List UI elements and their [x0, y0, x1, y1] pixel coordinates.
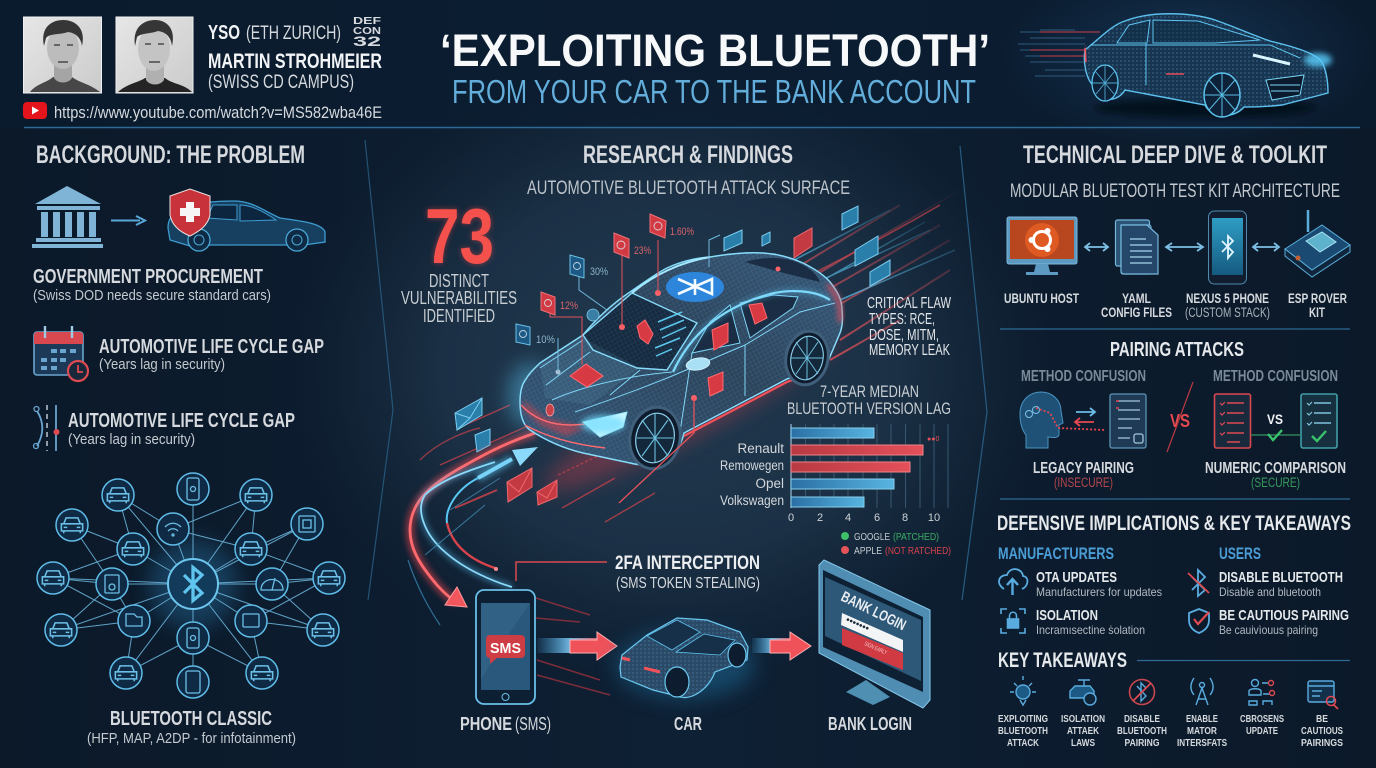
text: isolation: [1036, 607, 1145, 637]
stat: 73 vulnerabilities: IDENTIFIED: [423, 306, 495, 326]
windows: [583, 293, 697, 370]
stat: 73 vulnerabilities: DISTINCT: [429, 271, 489, 291]
axis labels: 4: [845, 512, 851, 524]
speaker names: (ETH ZURICH): [246, 23, 341, 44]
header wireframe car: [1018, 14, 1332, 118]
stat: 73 vulnerabilities: VULNERABILITIES: [401, 288, 517, 308]
window data panel: [655, 312, 686, 356]
icon: numeric comparison: VS: [1267, 412, 1283, 427]
takeaway labels: DISABLE: [1124, 713, 1160, 725]
panel: research and findings: [401, 141, 960, 734]
panel: technical deep dive: [997, 141, 1351, 749]
headlight: [583, 412, 627, 437]
legend: APPLE: [854, 545, 882, 557]
wheels: [624, 327, 833, 474]
pairing labels: (SECURE): [1251, 475, 1300, 490]
hood highlight: [540, 338, 640, 405]
panel dividers: [365, 140, 987, 600]
text: critical flaw types: TYPES: RCE,: [869, 311, 935, 328]
icon: car with swiss shield: [168, 189, 325, 251]
icon: road timeline: [34, 405, 60, 451]
takeaway labels: PAIRINGS: [1301, 737, 1343, 749]
phone streaks: [536, 598, 610, 695]
pairing labels: LEGACY PAIRING: [1033, 460, 1134, 477]
arrow: car to bank: [752, 632, 811, 660]
kit labels: KIT: [1309, 305, 1326, 320]
icon: government building: [32, 186, 103, 248]
kit labels: ESP ROVER: [1288, 291, 1347, 306]
text: disable bluetooth: Disable and bluetooth: [1219, 585, 1321, 599]
icon: browser search: [1308, 681, 1338, 709]
percentage callouts: 10%: [536, 334, 555, 346]
icon: config files: [1116, 220, 1158, 274]
method labels: METHOD CONFUSION: [1021, 368, 1146, 385]
takeaway labels: CBROSENS: [1240, 713, 1284, 725]
panel: background, the problem: [32, 141, 345, 747]
2FA interception callout: 2FA INTERCEPTION: [615, 553, 760, 574]
chain labels: (SMS): [515, 714, 551, 734]
text: critical flaw types: [867, 295, 951, 359]
video link: https://www.youtube.com/watch?v=MS582wba46E: [54, 103, 382, 122]
icon: bluetooth disabled: [1188, 570, 1209, 596]
icon: lock: [1001, 609, 1025, 633]
takeaway labels: UPDATE: [1246, 725, 1278, 737]
icon: shield check: [1189, 609, 1209, 633]
pairing labels: [1033, 460, 1346, 490]
takeaway labels: PAIRING: [1124, 737, 1160, 749]
chart title: 7-YEAR MEDIAN: [820, 382, 919, 401]
text: government procurement: [33, 266, 271, 304]
header divider: [24, 126, 1360, 128]
icon: paired document: [1110, 394, 1146, 448]
speaker names: MARTIN STROHMEIER: [208, 50, 382, 73]
text: government procurement: GOVERNMENT PROCUREMENT: [33, 266, 263, 288]
icon: nexus phone: [1208, 211, 1246, 284]
data streaks: [440, 190, 960, 522]
icon: ubuntu monitor: [1007, 217, 1077, 275]
text: be cautious: [1219, 607, 1349, 637]
icon: car and gear: [1070, 680, 1096, 705]
kit labels: NEXUS 5 PHONE: [1186, 291, 1269, 306]
car body: [520, 253, 842, 465]
legend: (PATCHED): [893, 531, 939, 543]
text: critical flaw types: CRITICAL FLAW: [867, 295, 951, 312]
percentage callouts: 23%: [634, 245, 651, 257]
legend: (NOT RATCHED): [885, 545, 951, 557]
attack chain: [460, 560, 930, 734]
chart: bluetooth version lag: ●●0: [927, 436, 939, 443]
text: critical flaw types: MEMORY LEAK: [869, 342, 950, 359]
category labels: Opel: [755, 476, 784, 491]
axis labels: 10: [928, 512, 940, 524]
text: be cautious: Be cauivìouus pairing: [1219, 623, 1318, 637]
text: isolation: ISOLATION: [1036, 607, 1098, 624]
icon: calendar with clock: [34, 326, 88, 381]
title: FROM YOUR CAR TO THE BANK ACCOUNT: [452, 73, 976, 110]
takeaway icons: [1010, 676, 1338, 709]
chart title: [787, 382, 951, 418]
chart: bluetooth version lag: [720, 382, 951, 557]
chain labels: [460, 714, 912, 734]
stat: 73 vulnerabilities: [401, 192, 517, 326]
speaker names: YSO: [208, 22, 240, 44]
category labels: Remowegen: [720, 458, 784, 473]
pairing labels: (INSECURE): [1054, 475, 1113, 490]
stat: 73 vulnerabilities: 73: [425, 192, 494, 280]
icon: small car: [615, 618, 755, 699]
DEF CON 32 logo: [353, 15, 382, 49]
icon: bank login monitor: [819, 560, 930, 708]
text: OTA updates: Manufacturers for updates: [1036, 585, 1162, 599]
text: life cycle gap second: [68, 410, 295, 448]
axis labels: 6: [874, 512, 880, 524]
takeaway labels: LAWS: [1071, 737, 1095, 749]
2FA interception callout: (SMS TOKEN STEALING): [616, 575, 760, 592]
icon: bank login monitor: •••••••: [844, 615, 871, 635]
icon: phone with SMS: SMS: [490, 640, 521, 657]
icon: bank login monitor: SIGN EARLY: [863, 641, 888, 657]
arrow: [1085, 243, 1108, 251]
icon: phone with SMS: [476, 590, 535, 704]
bars: [791, 428, 923, 507]
speaker photo 2: [116, 17, 193, 93]
text: OTA updates: OTA UPDATES: [1036, 569, 1117, 586]
column headings: MANUFACTURERS: [998, 544, 1114, 563]
icon: head with confusion: [1020, 392, 1106, 448]
icon: YouTube: [23, 102, 47, 119]
column headings: [998, 544, 1261, 563]
chain labels: PHONE: [460, 714, 512, 734]
speaker names: [208, 22, 382, 93]
axis labels: 8: [902, 512, 908, 524]
arrow: [1253, 243, 1279, 251]
arrow: [1166, 243, 1203, 251]
kit labels: YAML: [1122, 291, 1151, 306]
chain labels: CAR: [674, 714, 702, 734]
main car illustration: [508, 253, 848, 510]
text: government procurement: (Swiss DOD needs secure standard cars): [33, 288, 271, 304]
speaker names: (SWISS CD CAMPUS): [208, 72, 354, 93]
takeaway labels: BLUETOOTH: [998, 725, 1048, 737]
takeaway labels: EXPLOITING: [998, 713, 1048, 725]
category labels: [720, 441, 784, 508]
legend: [841, 531, 951, 557]
subheading: attack surface: AUTOMOTIVE BLUETOOTH ATTACK SURFACE: [527, 177, 850, 199]
icon: bulb: [1010, 676, 1036, 705]
text: isolation: Incramısectine ṡolation: [1036, 623, 1145, 637]
chart title: BLUETOOTH VERSION LAG: [787, 399, 951, 418]
text: life cycle gap second: (Years lag in security): [68, 432, 195, 448]
icon: ESP board: [1285, 210, 1350, 277]
section: defensive implications: [997, 512, 1351, 637]
arrow: [111, 216, 145, 225]
legend: GOOGLE: [854, 531, 890, 543]
speaker photo 1: [24, 17, 102, 93]
heading: research: RESEARCH & FINDINGS: [583, 141, 793, 169]
percentage callouts: 12%: [560, 300, 578, 312]
icon: people network: [1249, 680, 1274, 705]
header: speakers: [23, 15, 382, 122]
icon: antenna: [1191, 678, 1213, 705]
rear light and lower edge: [828, 285, 840, 322]
floating message icons: [455, 206, 890, 505]
vs badge: [1167, 382, 1193, 452]
kit labels: CONFIG FILES: [1101, 305, 1172, 320]
mirrors: [685, 356, 711, 372]
takeaway labels: BLUETOOTH: [1117, 725, 1167, 737]
title: [440, 25, 990, 110]
percentage callouts: 1.60%: [670, 226, 694, 238]
icon: cloud upload: [999, 569, 1027, 595]
section: key takeaways: [998, 649, 1350, 749]
text: disable bluetooth: [1219, 569, 1343, 599]
DEF CON 32 logo: DEF: [353, 15, 382, 27]
takeaway labels: [998, 713, 1343, 749]
percentage callouts: [516, 214, 720, 503]
text: life cycle gap: (Years lag in security): [99, 357, 225, 373]
sweeping attack paths: [408, 428, 538, 625]
DEF CON 32 logo: CON: [353, 25, 381, 37]
takeaway labels: ISOLATION: [1061, 713, 1105, 725]
heading: key takeaways: KEY TAKEAWAYS: [998, 649, 1127, 672]
arrow: phone to car: [537, 632, 617, 660]
text: critical flaw types: DOSE, MITM,: [869, 327, 939, 344]
section: pairing attacks: [1020, 339, 1346, 490]
2FA interception callout: [516, 553, 760, 592]
vs badge: VS: [1170, 411, 1190, 431]
takeaway labels: MATOR: [1187, 725, 1217, 737]
text: bluetooth classic: [87, 708, 296, 747]
text: OTA updates: [1036, 569, 1162, 599]
bluetooth roof badge: [666, 272, 724, 302]
text: life cycle gap second: AUTOMOTIVE LIFE CYCLE GAP: [68, 410, 295, 432]
kit labels: [1004, 291, 1347, 320]
heading: pairing attacks: PAIRING ATTACKS: [1110, 339, 1244, 361]
text: bluetooth classic: BLUETOOTH CLASSIC: [110, 708, 272, 730]
text: bluetooth classic: (HFP, MAP, A2DP - for infotainment): [87, 731, 296, 747]
icon: numeric comparison: [1214, 394, 1337, 448]
percentage callouts: 30%: [590, 266, 608, 278]
takeaway labels: INTERSFATS: [1177, 737, 1227, 749]
method labels: [1021, 368, 1338, 385]
icon: prohibited bluetooth: [1130, 680, 1154, 704]
category labels: Renault: [737, 441, 784, 456]
takeaway labels: ATTACK: [1007, 737, 1039, 749]
takeaway labels: ENABLE: [1186, 713, 1218, 725]
bluetooth network diagram: [37, 473, 345, 698]
title: ‘EXPLOITING BLUETOOTH’: [440, 25, 990, 76]
icon: bank login monitor: BANK LOGIN: [838, 588, 909, 634]
takeaway labels: ATTAEK: [1067, 725, 1099, 737]
axis labels: 2: [817, 512, 823, 524]
column headings: USERS: [1219, 544, 1261, 563]
grille and front glow: [523, 400, 585, 436]
kit labels: UBUNTU HOST: [1004, 291, 1080, 306]
category labels: Volkswagen: [720, 493, 784, 508]
chain labels: BANK LOGIN: [828, 714, 912, 734]
stat: 73 vulnerabilities: 73: [425, 192, 494, 280]
text: life cycle gap: [99, 336, 324, 373]
takeaway labels: BE: [1316, 713, 1328, 725]
axis labels: 0: [788, 512, 794, 524]
DEF CON 32 logo: 32: [353, 33, 381, 49]
axis labels: [788, 512, 940, 524]
text: life cycle gap: AUTOMOTIVE LIFE CYCLE GAP: [99, 336, 324, 358]
test kit architecture: [1004, 210, 1350, 320]
vulnerability markers on car: [570, 303, 767, 396]
kit labels: (CUSTOM STACK): [1185, 305, 1270, 320]
heading: background: BACKGROUND: THE PROBLEM: [36, 141, 305, 169]
takeaway labels: CAUTIOUS: [1301, 725, 1343, 737]
